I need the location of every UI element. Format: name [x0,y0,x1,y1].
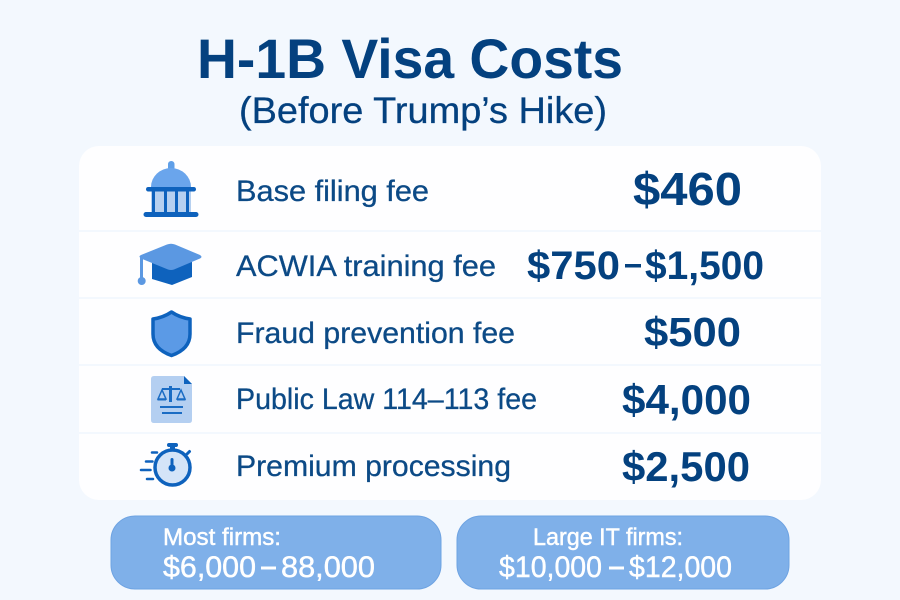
text: most firms range: 88,000 [281,551,375,584]
icon: government dome [144,161,198,217]
icon: stopwatch [141,443,190,485]
text: most firms label: Most firms: [163,524,281,551]
icon: shield [153,312,190,356]
text: most firms range [163,551,375,584]
row: ACWIA training fee [138,244,764,288]
row: fraud prevention fee [153,309,741,356]
row: base filing fee [144,161,742,217]
label: ACWIA training fee: ACWIA training fee [236,250,496,283]
icon: legal document [151,376,192,423]
row: premium processing [141,443,750,490]
value: $750–$1,500: $1,500 [645,244,764,288]
text: large IT firms range: $10,000 [499,551,602,584]
label: base filing fee: Base filing fee [236,175,429,208]
label: premium processing: Premium processing [236,450,511,483]
text: large IT firms range [499,551,732,584]
label: fraud prevention fee: Fraud prevention fee [236,317,515,350]
panel: fee table [79,146,821,500]
value: $750–$1,500 [527,244,764,288]
subtitle: (Before Trump’s Hike) [239,90,607,131]
value: $750–$1,500: $750 [527,244,620,288]
value: $500: $500 [644,309,741,355]
text: large IT firms label: Large IT firms: [533,524,683,551]
value: $4,000: $4,000 [622,376,751,423]
text: large IT firms range: $12,000 [629,551,732,584]
row: Public Law 114–113 fee [151,376,751,423]
value: $2,500: $2,500 [622,443,750,490]
value: $460: $460 [633,163,742,215]
text: most firms range: $6,000 [163,551,256,584]
title: H-1B Visa Costs [197,27,623,90]
callout: most firms [111,516,441,589]
callout: large IT firms [457,516,789,589]
icon: graduation cap [138,244,202,285]
label: Public Law 114–113 fee: Public Law 114–113 fee [236,383,537,416]
